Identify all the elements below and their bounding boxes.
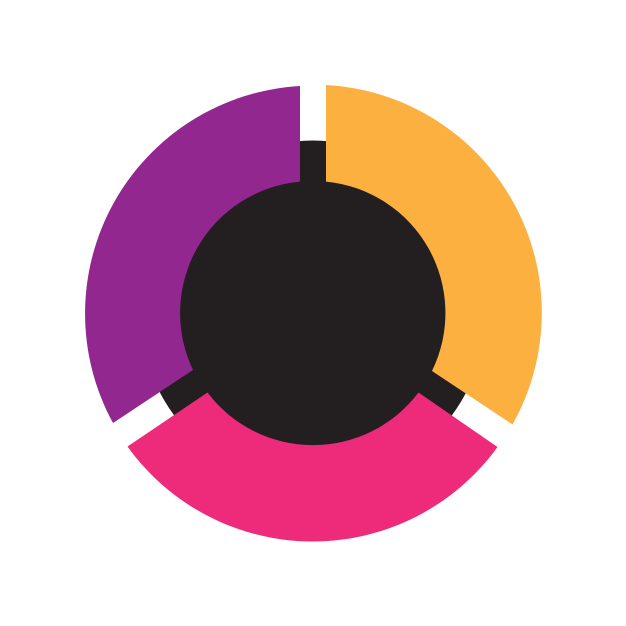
segment: pink — [128, 392, 498, 541]
segment: orange — [326, 85, 542, 424]
dark center hub with spokes — [140, 140, 486, 486]
segment: purple — [85, 86, 300, 423]
